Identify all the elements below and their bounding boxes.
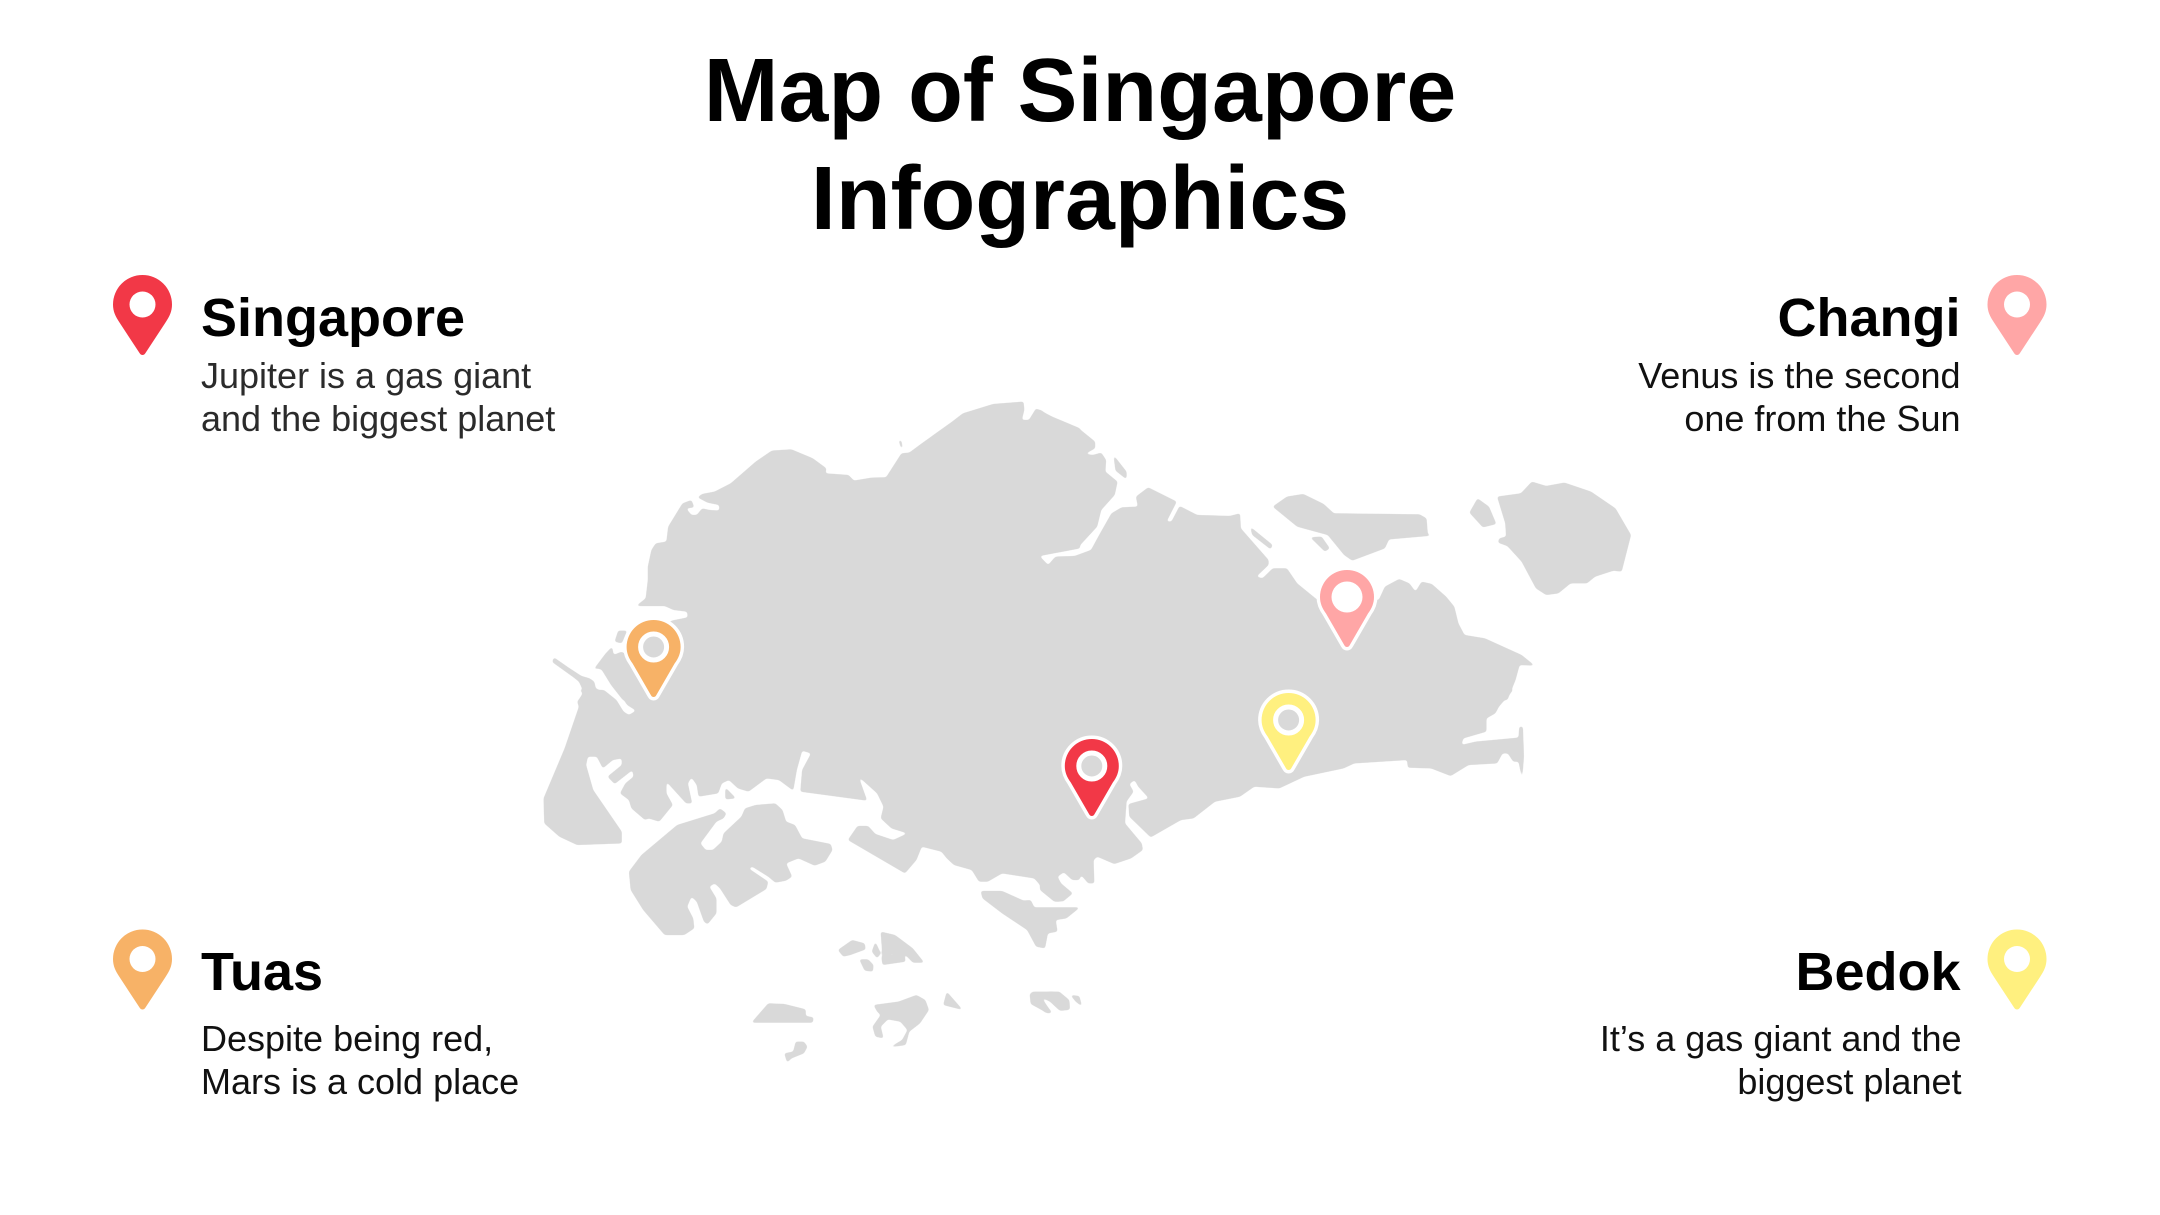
- title: Infographics: [811, 149, 1349, 249]
- text: Bedok description: It’s a gas giant and the: [1600, 1018, 1962, 1059]
- map pin: Bedok (yellow): [1262, 693, 1316, 770]
- text: Tuas description: Mars is a cold place: [201, 1061, 519, 1102]
- panel: Singapore: [113, 275, 555, 439]
- text: Bedok description: biggest planet: [1737, 1061, 1962, 1102]
- text: Singapore description: [201, 355, 555, 439]
- icon: orange pin: [113, 930, 172, 1010]
- panel: Bedok: [1600, 930, 2046, 1102]
- map of Singapore: [544, 402, 1631, 1063]
- text: Singapore description: and the biggest planet: [201, 398, 555, 439]
- heading: Tuas: Tuas: [201, 942, 323, 1002]
- icon: pink pin: [1988, 275, 2046, 355]
- northeast landmass and islands: [1040, 409, 1631, 700]
- text: Changi description: [1638, 355, 1960, 439]
- text: Bedok description: [1600, 1018, 1962, 1102]
- map pin: Tuas (orange): [627, 620, 681, 697]
- panel: Changi: [1638, 275, 2046, 439]
- text: Singapore description: Jupiter is a gas giant: [201, 355, 531, 396]
- heading: Singapore: Singapore: [201, 288, 465, 348]
- title: Map of Singapore: [704, 41, 1456, 141]
- text: Changi description: Venus is the second: [1638, 355, 1960, 396]
- icon: yellow pin: [1988, 930, 2046, 1010]
- text: Tuas description: Despite being red,: [201, 1018, 493, 1059]
- icon: red pin: [113, 275, 172, 355]
- heading: Changi: Changi: [1778, 288, 1960, 348]
- map pin: Changi (pink): [1320, 570, 1374, 647]
- northwest landmass: [552, 402, 1080, 700]
- map pin: Singapore (red): [1065, 739, 1119, 816]
- text: Changi description: one from the Sun: [1684, 398, 1960, 439]
- panel: Tuas: [113, 930, 519, 1102]
- title: [704, 41, 1456, 249]
- heading: Bedok: Bedok: [1795, 942, 1961, 1002]
- east coast landmass: [1030, 690, 1524, 1013]
- text: Tuas description: [201, 1018, 519, 1102]
- southwest landmass and southern islands: [544, 690, 1080, 1063]
